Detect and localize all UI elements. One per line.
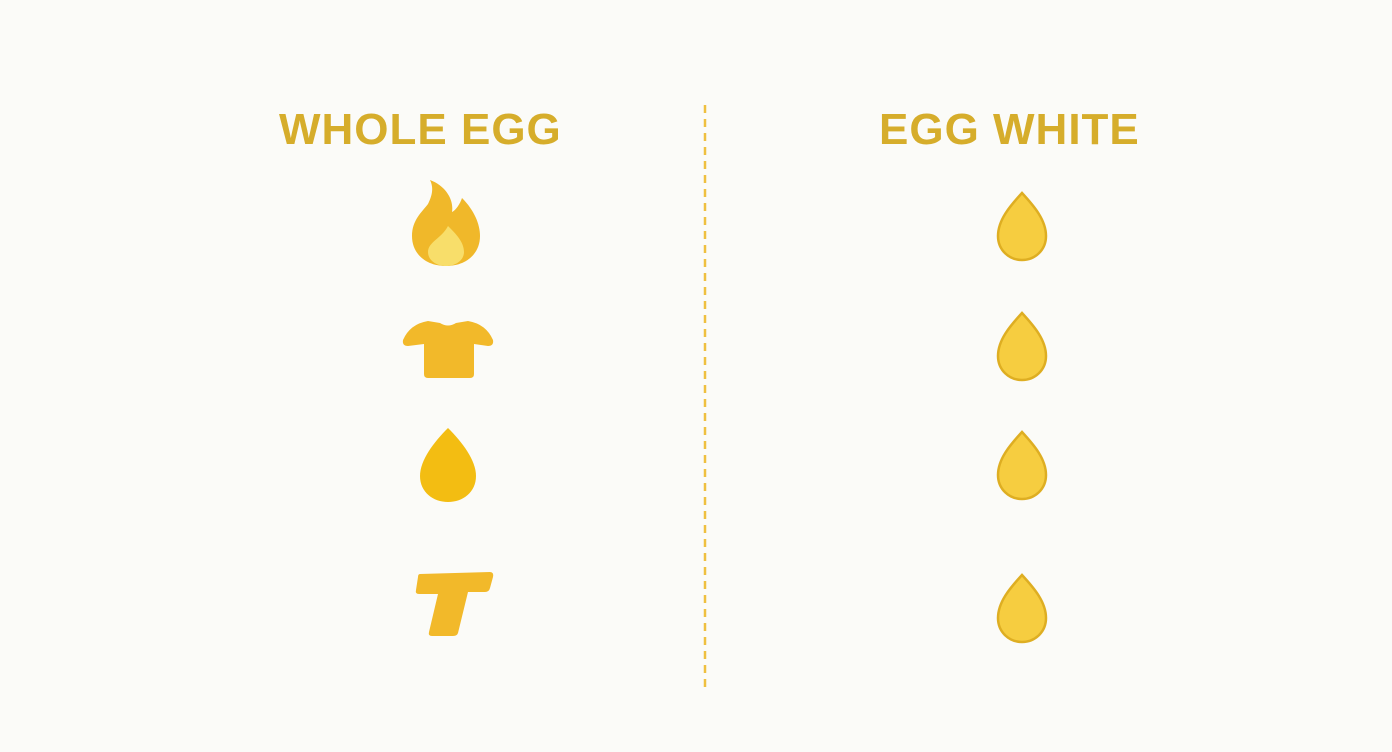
icon: white drop 2 [996,311,1048,382]
icon: white drop 4 [996,573,1048,644]
icon: shirt [402,321,494,378]
icon: white drop 3 [996,430,1048,500]
divider: dashed line [704,105,706,687]
icon: T shape [416,572,494,636]
icon: yolk drop [420,428,476,502]
title: whole egg: WHOLE EGG [279,105,562,154]
icon: fire [412,180,480,266]
title: egg white: EGG WHITE [879,105,1140,154]
icon: white drop 1 [996,191,1048,262]
